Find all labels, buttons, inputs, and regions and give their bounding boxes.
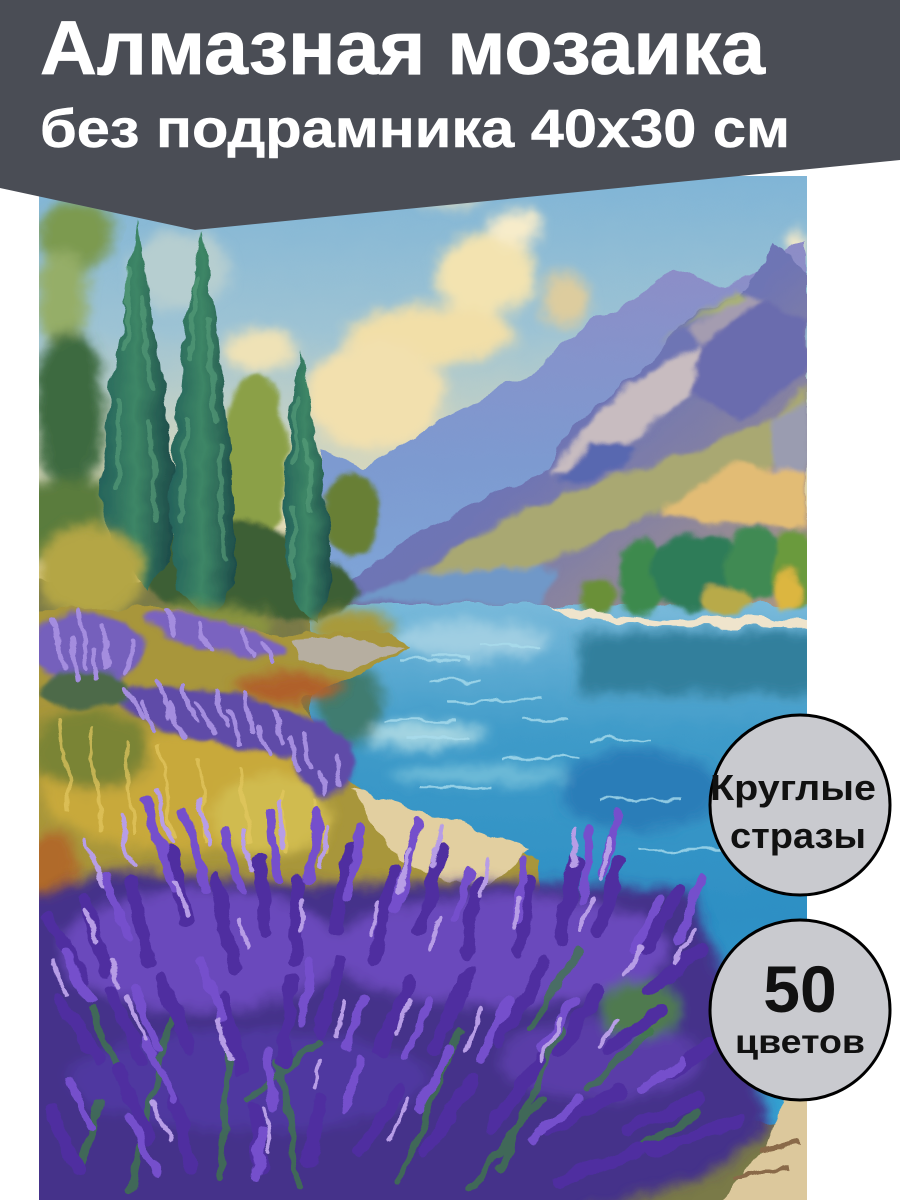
- mid lavender bands: [33, 603, 358, 797]
- lavender stalks mid: [65, 800, 700, 1180]
- island with trees: [552, 529, 817, 628]
- painting: lavender lake landscape: [20, 160, 820, 1200]
- title: Алмазная мозаика: [40, 6, 766, 91]
- near mountain: [340, 245, 807, 625]
- header banner: [0, 0, 900, 230]
- left shrub and bank: [35, 524, 394, 646]
- subtitle: без подрамника 40х30 см: [40, 99, 790, 159]
- rock faces and slopes: [345, 292, 807, 606]
- badge: round rhinestones: Круглые: [710, 767, 876, 808]
- leaf streaks: [80, 950, 700, 1190]
- grass: [39, 664, 351, 898]
- lavender stalks dark: [50, 850, 740, 1180]
- cypress trees: [100, 222, 332, 622]
- distant mountains: [320, 240, 807, 610]
- badge: 50 colours: цветов: [735, 1023, 865, 1060]
- badge: round rhinestones: стразы: [730, 815, 866, 856]
- clouds: [130, 192, 810, 450]
- shore bank: [39, 604, 540, 896]
- big lavender base: [20, 870, 770, 1200]
- water ripples: [385, 645, 730, 850]
- sand bottom right: [723, 1100, 807, 1200]
- lavender stalks light: [50, 790, 695, 1150]
- water reflections: [318, 622, 820, 830]
- left trees background: [20, 201, 380, 620]
- badge: round rhinestones: [710, 715, 890, 895]
- badge: 50 colours: [710, 920, 890, 1100]
- badge: 50 colours: 50: [763, 952, 837, 1026]
- lake: [310, 604, 820, 1124]
- sky: [20, 160, 820, 580]
